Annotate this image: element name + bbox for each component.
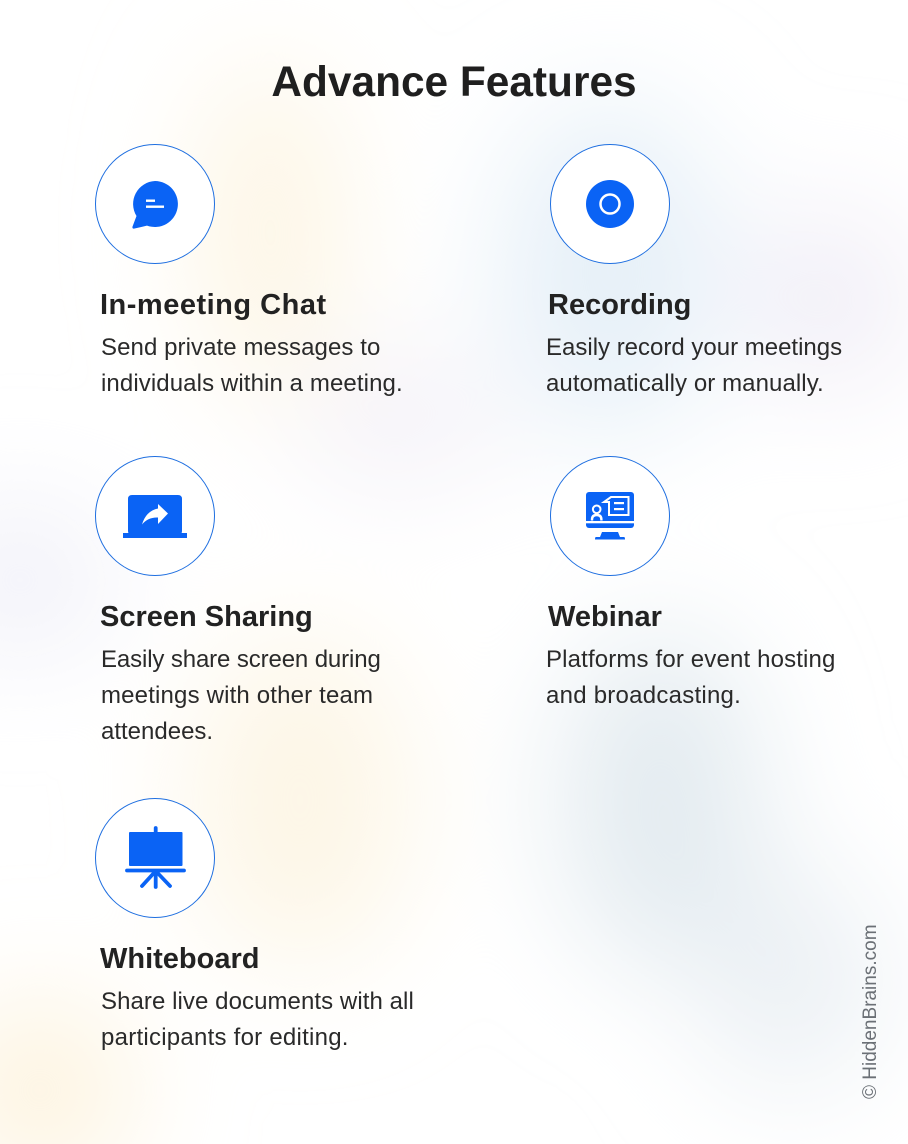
description: and broadcasting. [546, 682, 741, 709]
description [546, 646, 836, 709]
title: Advance Features [271, 58, 637, 105]
panel: Whiteboard [95, 798, 414, 1051]
panel: Webinar [546, 456, 836, 709]
description [546, 334, 842, 397]
icon: record button [550, 144, 670, 264]
description: meetings with other team [101, 682, 373, 709]
description: individuals within a meeting. [101, 370, 403, 397]
icon: laptop share [95, 456, 215, 576]
heading: Recording [548, 289, 691, 321]
description: Easily record your meetings [546, 334, 842, 361]
heading: Webinar [548, 601, 662, 633]
description: Platforms for event hosting [546, 646, 836, 673]
description: automatically or manually. [546, 370, 824, 397]
description: Easily share screen during [101, 646, 381, 673]
description: Send private messages to [101, 334, 380, 361]
panel: Screen Sharing [95, 456, 381, 745]
icon: chat bubble [95, 144, 215, 264]
panel: Recording [546, 144, 842, 397]
heading: In-meeting Chat [100, 289, 327, 321]
description: participants for editing. [101, 1024, 349, 1051]
panel: In-meeting Chat [95, 144, 403, 397]
description [101, 988, 414, 1051]
description [101, 334, 403, 397]
heading: Screen Sharing [100, 601, 313, 633]
description [101, 646, 381, 745]
description: Share live documents with all [101, 988, 414, 1015]
icon: presentation board [95, 798, 215, 918]
icon: webinar monitor [550, 456, 670, 576]
copyright note: © HiddenBrains.com [860, 924, 881, 1099]
heading: Whiteboard [100, 943, 260, 975]
description: attendees. [101, 718, 213, 745]
